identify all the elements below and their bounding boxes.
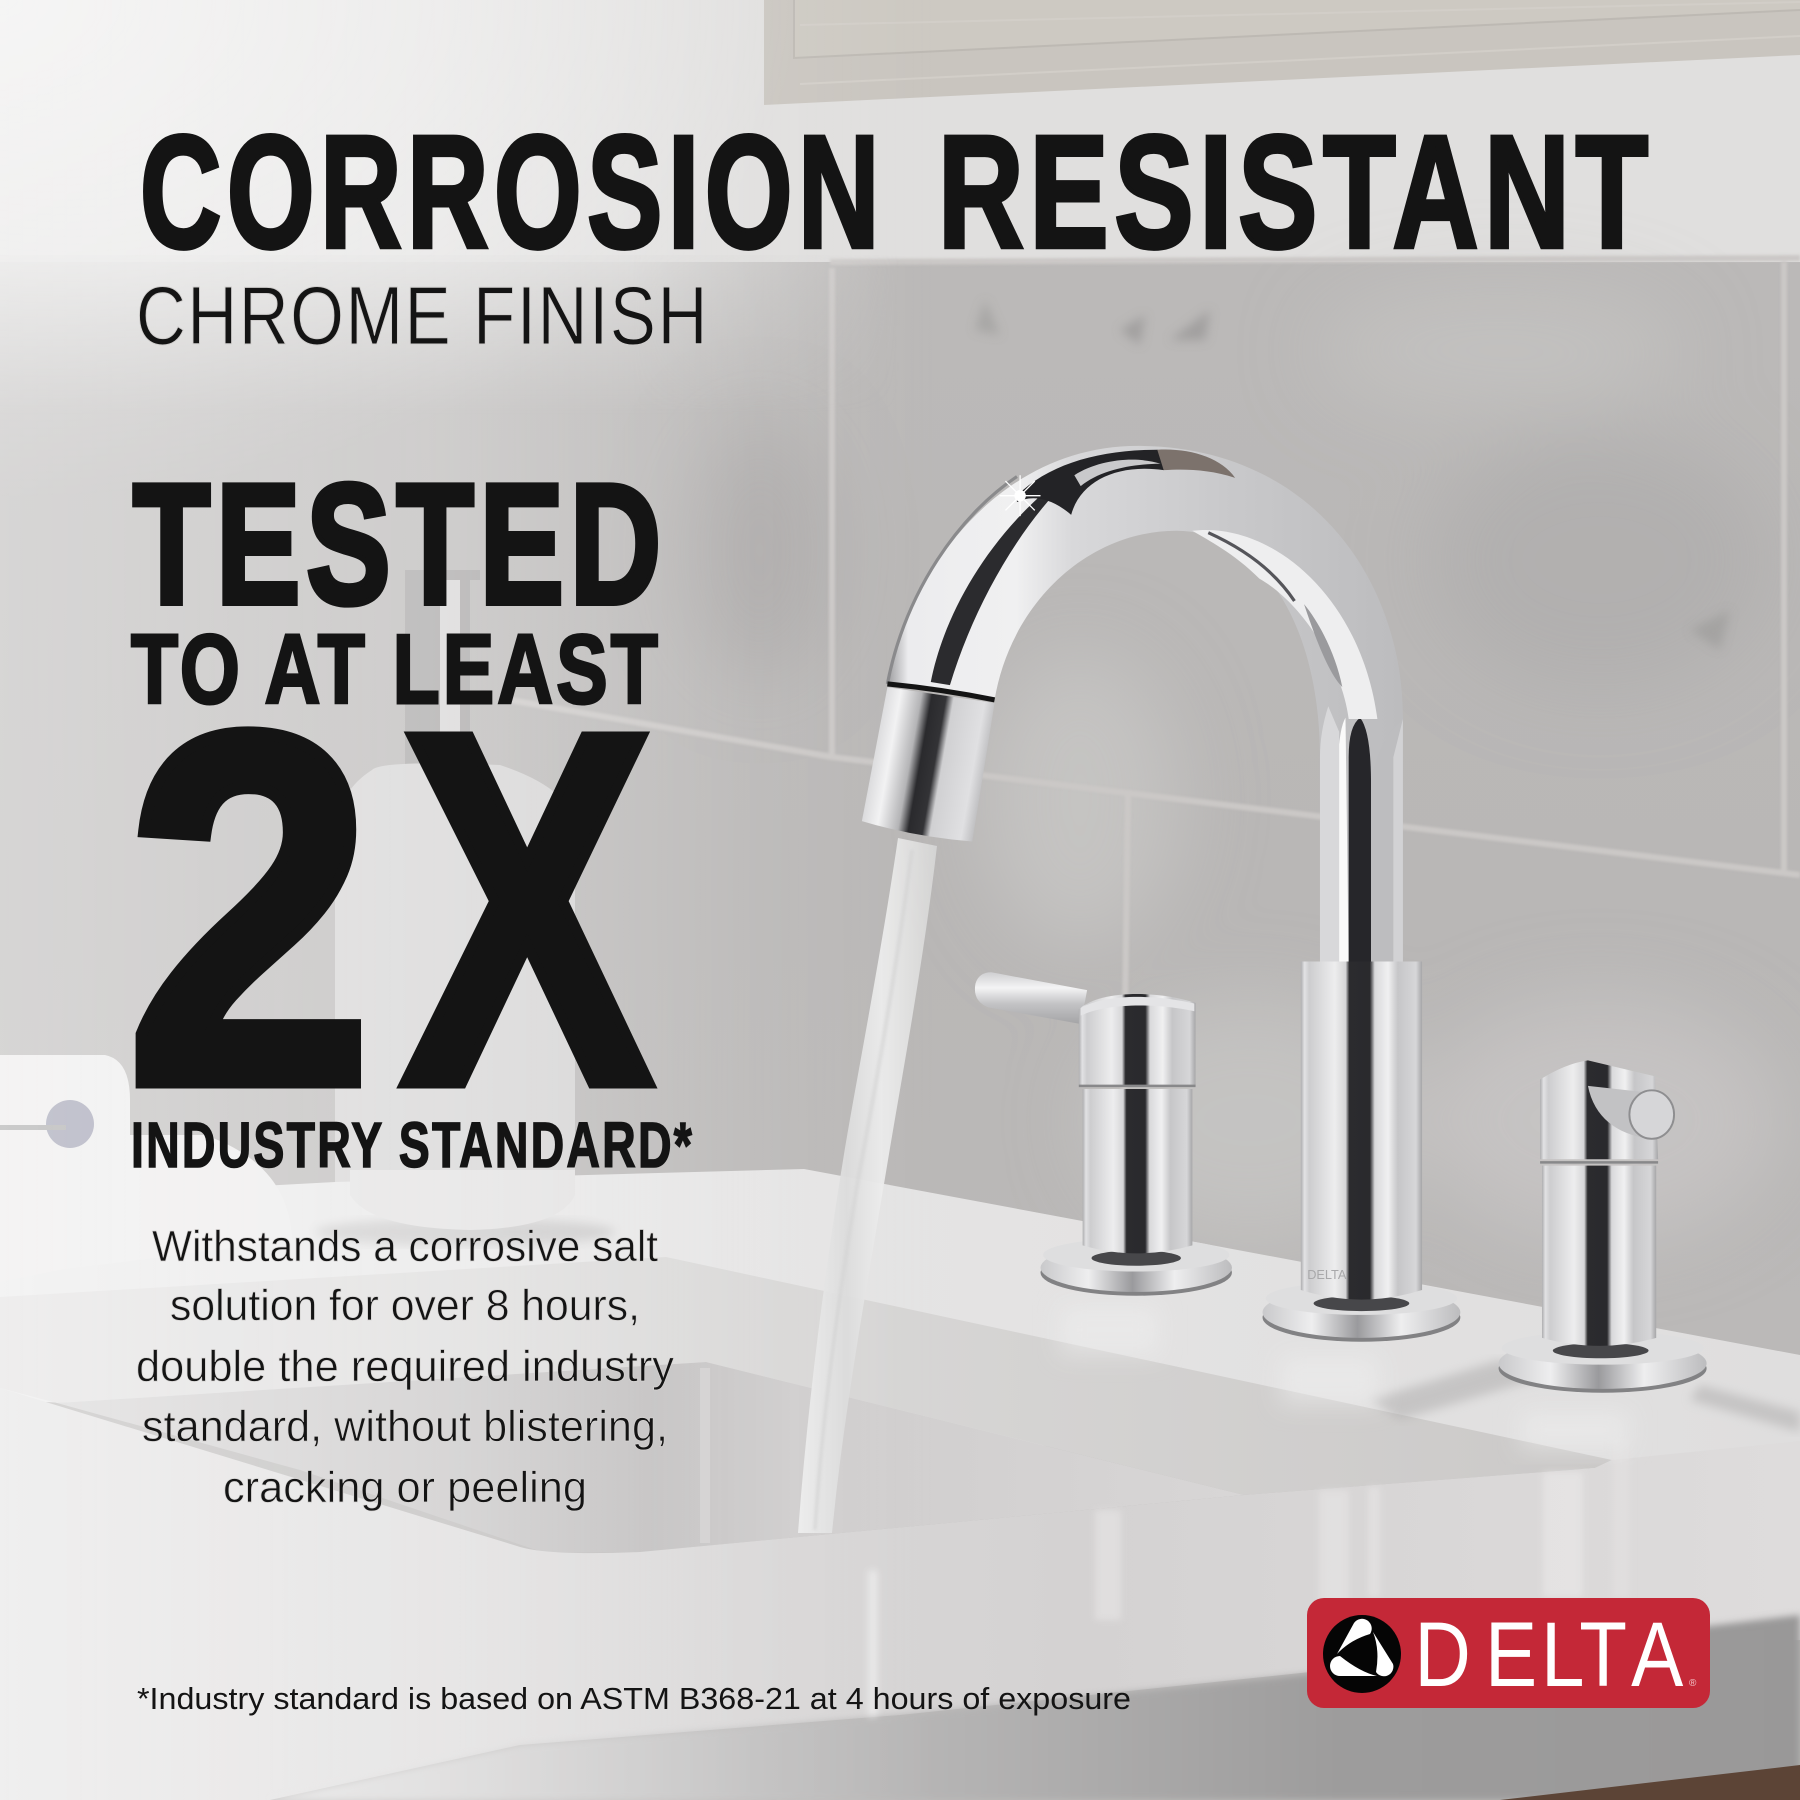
body text: double the required industry <box>136 1342 674 1391</box>
body text: cracking or peeling <box>223 1463 587 1512</box>
body text: Withstands a corrosive salt <box>152 1222 658 1271</box>
faucet shadows and reflections on counter <box>1060 1305 1800 1450</box>
wordmark: DELTA <box>1414 1604 1683 1706</box>
body text <box>136 1222 674 1512</box>
body text: solution for over 8 hours, <box>170 1281 640 1330</box>
centre base <box>1263 1282 1460 1342</box>
sink basin <box>57 1362 1244 1553</box>
faint engraved brand on body: DELTA <box>1307 1267 1347 1282</box>
footnote: *Industry standard is based on ASTM B368-21 at 4 hours of exposure <box>137 1681 1131 1716</box>
logo: Delta <box>1307 1598 1710 1708</box>
soap dispenser behind text <box>335 570 575 1230</box>
soap dispenser foot <box>315 1170 615 1246</box>
sink rim <box>0 1257 1612 1495</box>
registered mark: ® <box>1689 1678 1697 1689</box>
tile grout lines <box>510 258 1800 1240</box>
faucet <box>862 446 1707 1393</box>
body text: standard, without blistering, <box>142 1402 668 1451</box>
to at least: TO AT LEAST <box>131 614 661 724</box>
sparkle highlight <box>1000 475 1041 516</box>
subheading: chrome finish: CHROME FINISH <box>136 269 709 362</box>
spout dark reflection <box>931 473 1074 685</box>
front counter <box>0 1388 1800 1800</box>
2X <box>126 629 654 1188</box>
spout inner highlight <box>1192 530 1377 719</box>
claim: tested to at least 2X <box>126 449 694 1188</box>
top-left highlight <box>0 0 800 500</box>
heading: corrosion resistant <box>140 102 1654 281</box>
counter top surface <box>0 1169 1800 1470</box>
upper wall <box>0 0 1800 262</box>
2X: 2 <box>126 629 373 1188</box>
water stream <box>798 838 937 1533</box>
right handle base <box>1499 1331 1707 1393</box>
left handle base <box>1041 1238 1232 1296</box>
2X: X <box>402 629 654 1188</box>
left handle <box>975 972 1196 1253</box>
right handle <box>1540 1060 1674 1346</box>
heading: corrosion resistant: CORROSION <box>140 102 885 281</box>
marble tile wall veining <box>690 290 1780 1240</box>
industry standard: INDUSTRY STANDARD* <box>131 1109 694 1181</box>
tested: TESTED <box>133 449 667 640</box>
centre body <box>1301 961 1422 1300</box>
aerator <box>862 684 995 841</box>
fade from upper wall <box>0 262 824 364</box>
towel <box>0 1055 292 1282</box>
spout <box>887 446 1403 965</box>
mirror frame at top <box>764 0 1800 105</box>
icon: Delta triangle mark <box>1323 1615 1401 1693</box>
front edge shadow <box>270 1615 1800 1800</box>
wood cabinet <box>1500 1765 1800 1800</box>
counter reflections <box>868 1438 1630 1740</box>
spout leg reflections <box>1320 706 1339 965</box>
